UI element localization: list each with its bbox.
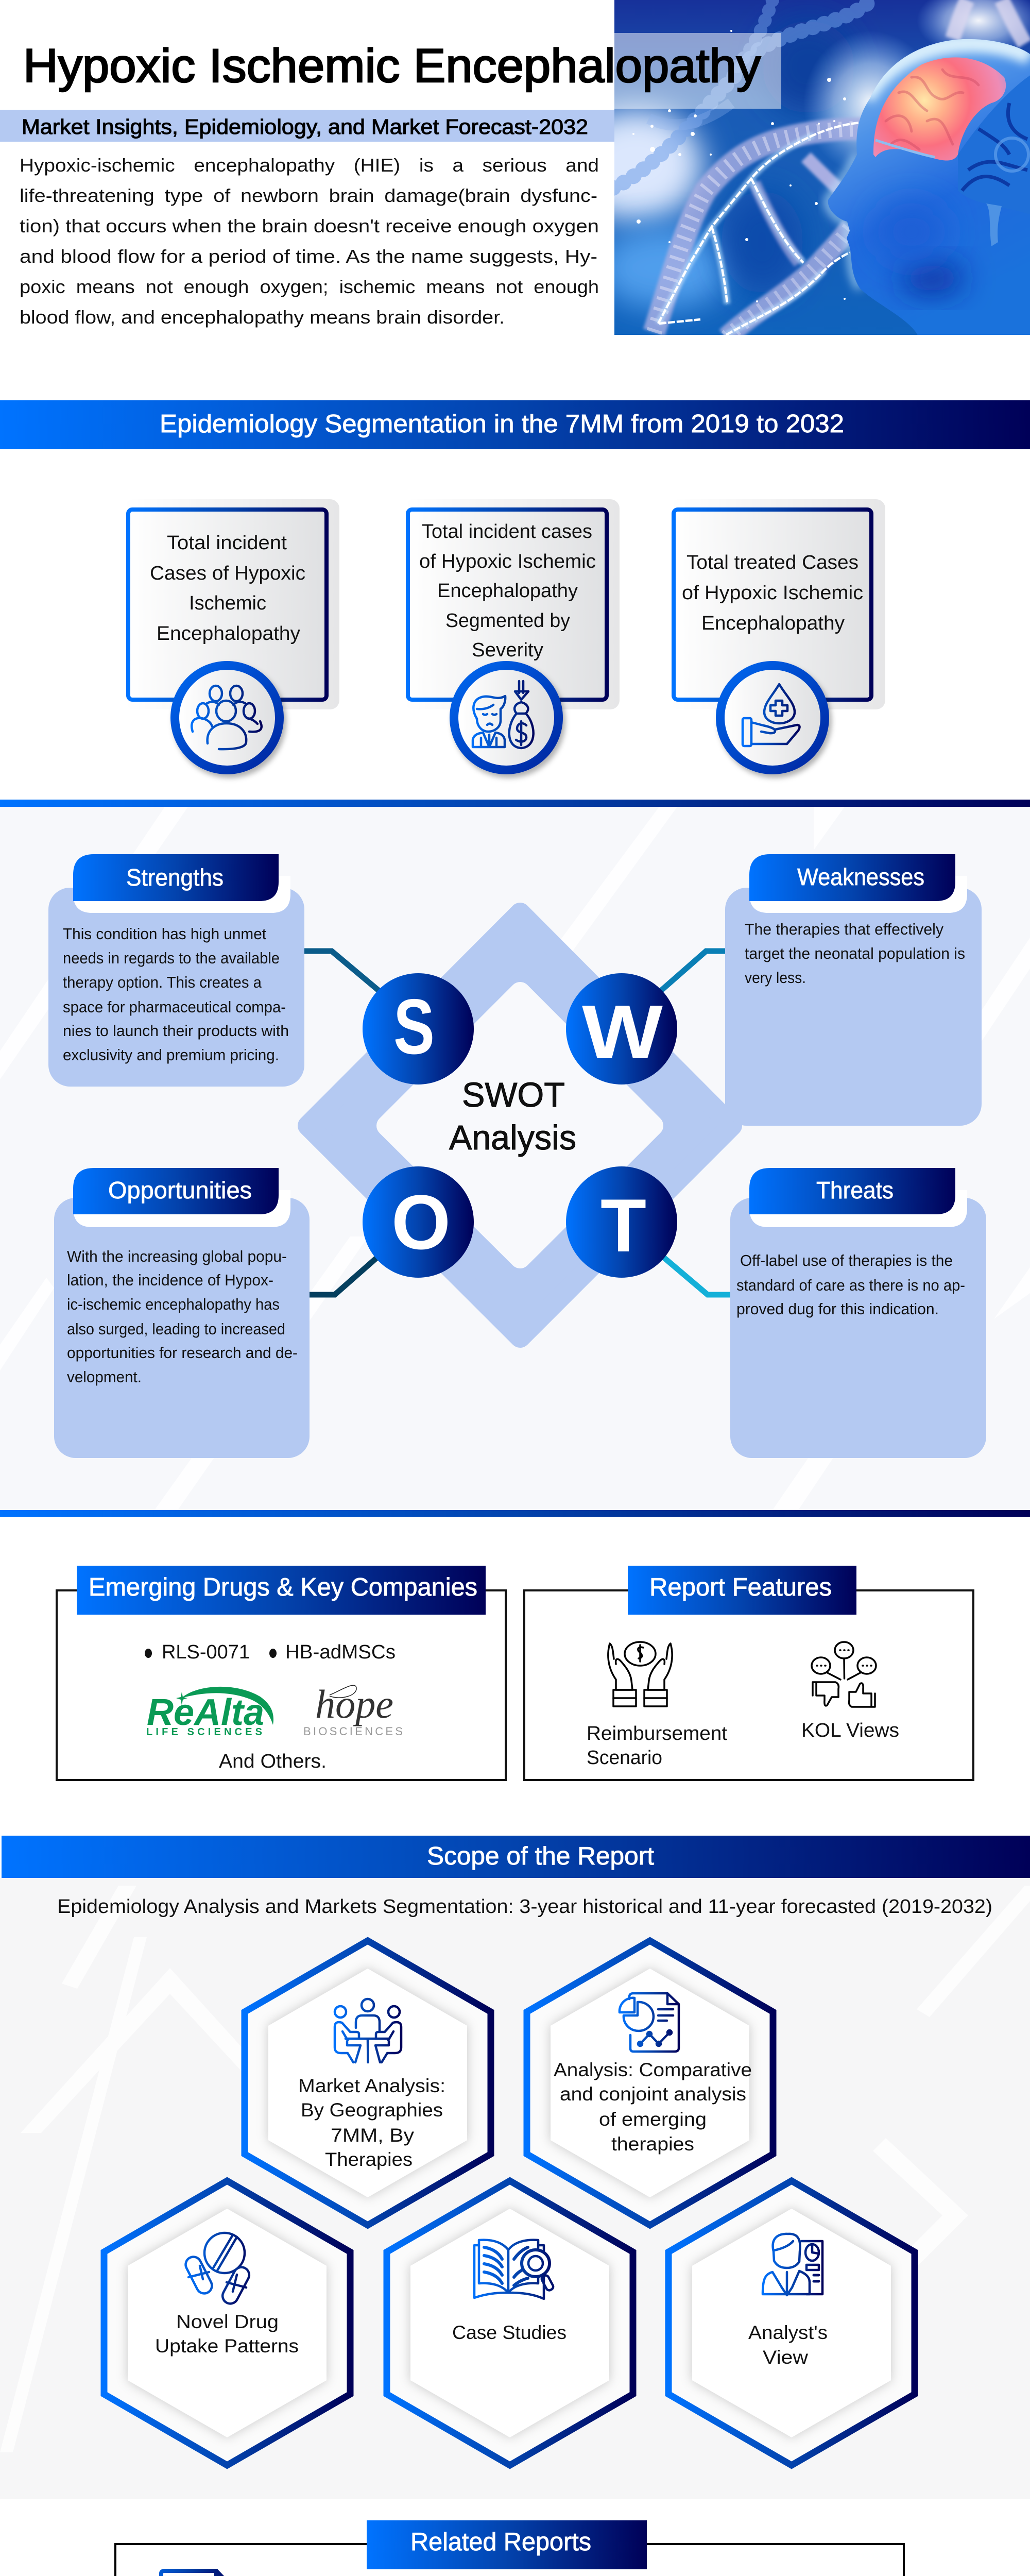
panel: opportunities: With the increasing global popu- bbox=[67, 1247, 287, 1265]
panel: opportunities: velopment. bbox=[67, 1368, 142, 1386]
hexagon: case studies: Case Studies bbox=[452, 2322, 566, 2343]
logo: Hope Biosciences: hope bbox=[315, 1682, 393, 1726]
panel: weaknesses: target the neonatal population is bbox=[745, 944, 965, 962]
section banner: scope of the report bbox=[2, 1836, 1030, 1878]
hero photo: brain and DNA bbox=[614, 0, 1030, 335]
icon: meeting table bbox=[335, 1999, 401, 2062]
intro paragraph: Hypoxic-ischemic encephalopathy (HIE) is a serious and bbox=[20, 155, 599, 176]
panel: related reports: Related Reports bbox=[410, 2528, 591, 2556]
logo: ReAlta Life Sciences: LIFE SCIENCES bbox=[146, 1726, 262, 1738]
icon: KOL opinion bubbles and thumbs bbox=[812, 1642, 876, 1707]
panel: opportunities: Opportunities bbox=[108, 1177, 252, 1204]
icon: pills bbox=[183, 2233, 252, 2307]
icon: hand holding medical drop bbox=[743, 684, 800, 746]
panel: threats: proved dug for this indication. bbox=[736, 1300, 939, 1318]
hexagon: market analysis: By Geographies bbox=[301, 2099, 443, 2121]
hexagon: novel drug uptake: Novel Drug bbox=[176, 2311, 279, 2332]
SWOT letter circle T bbox=[566, 1166, 677, 1278]
scope intro line: Epidemiology Analysis and Markets Segmentation: 3-year historical and 11-year forecasted (2019-2032) bbox=[57, 1896, 992, 1918]
SWOT Analysis heading bbox=[449, 1076, 576, 1157]
feature labels: Scenario bbox=[587, 1747, 662, 1769]
logo: ReAlta Life Sciences: ReAlta bbox=[147, 1692, 264, 1733]
card: total incident cases: Cases of Hypoxic bbox=[150, 563, 305, 584]
panel: strengths: nies to launch their products with bbox=[63, 1022, 289, 1040]
hexagon: comparative analysis: Analysis: Comparative bbox=[554, 2059, 752, 2080]
subtitle band: Market Insights, Epidemiology, and Market Forecast-2032 bbox=[22, 115, 588, 139]
panel: threats: Threats bbox=[816, 1177, 894, 1204]
card: incident cases by severity: Total incident cases bbox=[422, 521, 592, 543]
connector: opportunities bbox=[310, 1257, 377, 1295]
panel: opportunities: lation, the incidence of Hypox- bbox=[67, 1271, 273, 1289]
hexagon: novel drug uptake bbox=[104, 2181, 350, 2465]
SWOT background and rules bbox=[0, 800, 1030, 807]
panel: weaknesses: very less. bbox=[745, 969, 806, 987]
drug list: RLS-0071 bbox=[162, 1641, 250, 1663]
hexagon: market analysis: Market Analysis: bbox=[298, 2075, 445, 2096]
hexagon: market analysis: Therapies bbox=[325, 2149, 413, 2170]
logo: Hope Biosciences: BIOSCIENCES bbox=[303, 1725, 403, 1738]
card: incident cases by severity: Severity bbox=[472, 639, 543, 661]
panel: opportunities bbox=[54, 1168, 310, 1458]
title backing translucent rectangle bbox=[614, 33, 781, 109]
panel: strengths: therapy option. This creates a bbox=[63, 973, 262, 991]
feature labels: Reimbursement bbox=[587, 1723, 727, 1744]
panel: strengths: exclusivity and premium pricing. bbox=[63, 1046, 279, 1064]
intro paragraph bbox=[20, 155, 599, 328]
intro paragraph: and blood flow for a period of time. As the name suggests, Hy- bbox=[20, 246, 597, 267]
card: total treated cases bbox=[670, 499, 885, 774]
SWOT diamond bbox=[308, 913, 732, 1337]
panel: weaknesses: Weaknesses bbox=[797, 863, 924, 890]
SWOT letter circle W: W bbox=[582, 990, 663, 1075]
subtitle band bbox=[0, 110, 614, 142]
connector: threats bbox=[663, 1257, 730, 1295]
SWOT letter circle S: S bbox=[393, 983, 435, 1071]
SWOT letter circle S bbox=[363, 973, 474, 1084]
card: total incident cases: Ischemic bbox=[189, 592, 266, 614]
panel: strengths bbox=[48, 854, 304, 1087]
panel: strengths: space for pharmaceutical compa- bbox=[63, 998, 286, 1016]
hexagon: case studies bbox=[387, 2181, 633, 2465]
panel: report features: Report Features bbox=[649, 1573, 832, 1601]
panel: strengths: Strengths bbox=[126, 864, 224, 891]
card: total incident cases: Encephalopathy bbox=[157, 623, 300, 645]
hexagon: comparative analysis: and conjoint analysis bbox=[560, 2083, 746, 2105]
icon: report document bbox=[134, 2571, 236, 2576]
card: incident cases by severity: of Hypoxic Ischemic bbox=[419, 551, 596, 572]
panel: threats: Off-label use of therapies is the bbox=[740, 1251, 953, 1269]
panel: report features bbox=[524, 1566, 973, 1780]
card: incident cases by severity bbox=[404, 499, 620, 774]
SWOT letter circle O: O bbox=[391, 1179, 451, 1265]
hexagon: comparative analysis bbox=[527, 1941, 773, 2225]
hexagon: market analysis bbox=[245, 1941, 491, 2225]
panel: opportunities: ic-ischemic encephalopathy has bbox=[67, 1295, 280, 1313]
hexagon: comparative analysis: therapies bbox=[611, 2133, 694, 2155]
panel: threats: standard of care as there is no ap- bbox=[736, 1276, 965, 1294]
SWOT Analysis heading: SWOT bbox=[462, 1076, 565, 1114]
panel: related reports bbox=[115, 2520, 904, 2576]
panel: weaknesses: The therapies that effectively bbox=[745, 920, 943, 938]
intro paragraph: life-threatening type of newborn brain damage(brain dysfunc- bbox=[20, 185, 597, 206]
icon: analyst with board bbox=[763, 2234, 822, 2295]
logo: Hope Biosciences bbox=[303, 1682, 403, 1738]
hexagon: market analysis: 7MM, By bbox=[331, 2125, 415, 2146]
panel: emerging drugs and key companies: And Others. bbox=[219, 1751, 327, 1772]
feature labels bbox=[587, 1720, 899, 1769]
icon: man with money bag bbox=[473, 681, 534, 748]
section banner: epidemiology segmentation: Epidemiology Segmentation in the 7MM from 2019 to 2032 bbox=[160, 410, 844, 438]
panel: emerging drugs and key companies bbox=[57, 1566, 506, 1780]
SWOT letter circle T: T bbox=[600, 1183, 646, 1267]
intro paragraph: poxic means not enough oxygen; ischemic means not enough bbox=[20, 276, 599, 297]
SWOT letter circle O bbox=[363, 1166, 474, 1278]
card: incident cases by severity: Encephalopathy bbox=[437, 580, 578, 602]
hexagon: analyst's view: View bbox=[763, 2347, 808, 2368]
intro paragraph: tion) that occurs when the brain doesn't receive enough oxygen bbox=[20, 215, 599, 236]
card: total treated cases: Encephalopathy bbox=[701, 613, 845, 634]
panel: strengths: This condition has high unmet bbox=[63, 925, 266, 943]
icon: hands with coin bbox=[608, 1642, 672, 1706]
hexagon: analyst's view: Analyst's bbox=[748, 2322, 828, 2343]
SWOT Analysis heading: Analysis bbox=[449, 1118, 576, 1157]
connector: strengths bbox=[304, 951, 380, 991]
panel: threats bbox=[730, 1168, 986, 1458]
hexagon: novel drug uptake: Uptake Patterns bbox=[155, 2335, 299, 2357]
card: total incident cases: Total incident bbox=[167, 532, 287, 554]
card: total treated cases: Total treated Cases bbox=[686, 552, 859, 573]
card: total incident cases bbox=[125, 499, 339, 774]
panel: weaknesses bbox=[725, 854, 982, 1126]
panel: opportunities: also surged, leading to increased bbox=[67, 1320, 285, 1338]
panel: emerging drugs and key companies: Emerging Drugs & Key Companies bbox=[89, 1573, 477, 1601]
hexagon: comparative analysis: of emerging bbox=[599, 2109, 707, 2130]
intro paragraph: blood flow, and encephalopathy means brain disorder. bbox=[20, 307, 505, 328]
connector: weaknesses bbox=[660, 951, 725, 991]
feature labels: KOL Views bbox=[801, 1720, 899, 1741]
section banner: scope of the report: Scope of the Report bbox=[427, 1842, 654, 1870]
icon: open book with magnifier bbox=[474, 2240, 554, 2299]
section banner: epidemiology segmentation bbox=[0, 400, 1030, 449]
drug list: HB-adMSCs bbox=[285, 1641, 396, 1663]
hexagon: analyst's view bbox=[668, 2181, 915, 2465]
card: total treated cases: of Hypoxic Ischemic bbox=[682, 582, 863, 604]
card: incident cases by severity: Segmented by bbox=[445, 610, 570, 632]
SWOT letter circle W bbox=[566, 973, 677, 1084]
icon: report with pie chart bbox=[620, 1993, 679, 2052]
icon: group of people bbox=[192, 686, 262, 749]
drug list bbox=[145, 1641, 396, 1663]
panel: strengths: needs in regards to the available bbox=[63, 949, 280, 967]
panel: opportunities: opportunities for research and de- bbox=[67, 1344, 298, 1362]
title: Hypoxic Ischemic Encephalopathy bbox=[23, 40, 761, 92]
